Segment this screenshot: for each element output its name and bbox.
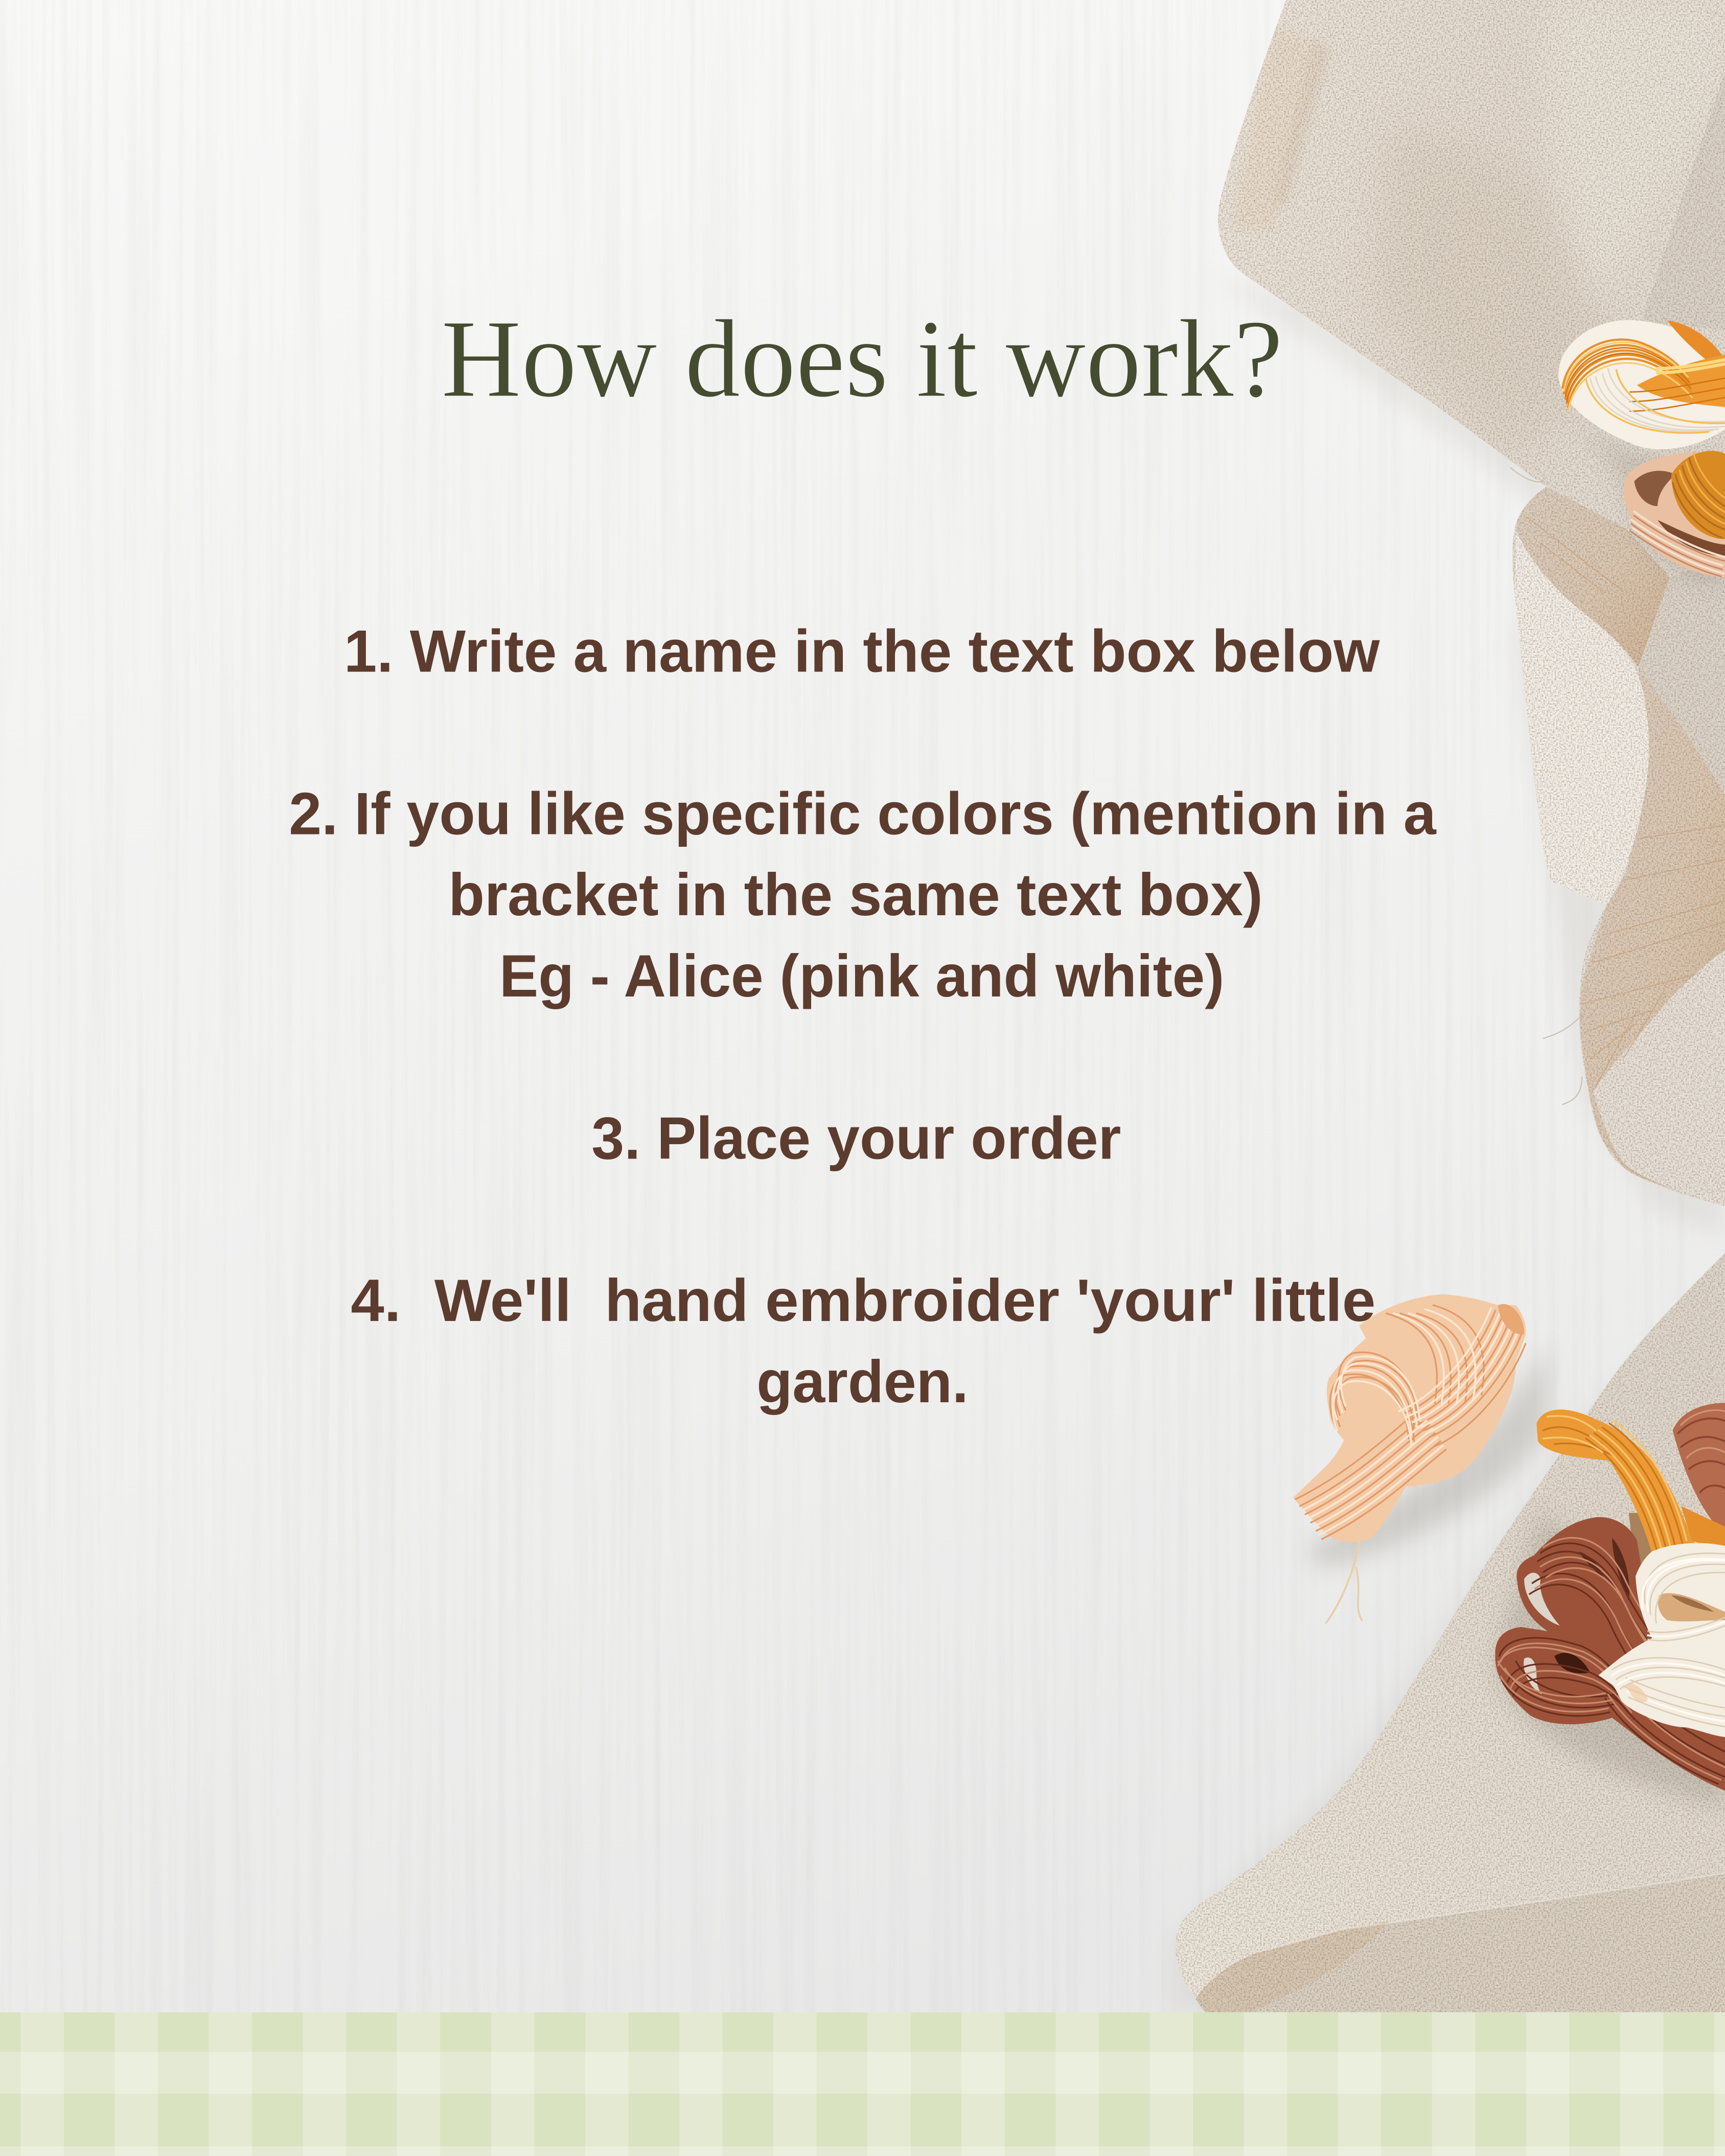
sheer corner of the lower cloth — [1191, 1921, 1389, 2015]
peach skein tail — [1326, 1538, 1362, 1623]
step 2 text: bracket in the same text box) — [448, 861, 1263, 928]
step 4 text — [351, 1267, 1375, 1415]
step 4 text: garden. — [756, 1348, 969, 1415]
cream skein: tan opening — [1658, 1593, 1725, 1621]
icon: peach skein — [1293, 1294, 1526, 1623]
step 2 text — [289, 780, 1437, 1009]
brown skein: dark crevices — [1554, 1538, 1629, 1674]
panel: lower right linen — [1593, 951, 1725, 1206]
brown skein: cloth through the loops — [1524, 1573, 1560, 1626]
panel: gingham border — [0, 2012, 1725, 2156]
icon: sheer mesh behind the brown skein — [1629, 1513, 1656, 1582]
mesh threads — [1527, 517, 1725, 1086]
icon: brown-orange skein, top right — [1623, 451, 1725, 577]
panel: upper linen cloth — [1210, 0, 1725, 1210]
upper cloth darker centre shade — [1375, 124, 1623, 454]
icon: terracotta skein, lower right — [1673, 1403, 1725, 1534]
cloth shadows — [1169, 275, 1725, 2012]
step 4 text: 4. We'll hand embroider 'your' little — [351, 1267, 1375, 1334]
fold right of the upper cloth — [1641, 72, 1725, 330]
title: How does it work? — [441, 297, 1283, 421]
panel: right mid linen — [1638, 557, 1725, 795]
yarn shadows — [1307, 402, 1725, 1809]
panel: sheer mesh band — [1579, 667, 1725, 1206]
panel: pale linen flap — [1514, 529, 1649, 905]
under fold of the lower cloth — [1191, 1873, 1725, 2015]
stray threads — [1510, 468, 1582, 1104]
step 2 text: Eg - Alice (pink and white) — [499, 942, 1224, 1009]
icon: orange skein, lower right — [1536, 1409, 1725, 1582]
icon: orange and white twisted skein, top right — [1558, 320, 1725, 449]
step 3 text: 3. Place your order — [591, 1104, 1121, 1171]
icon: brown skein, lower right — [1495, 1517, 1725, 1791]
icon: cream skein, lower right — [1598, 1543, 1725, 1737]
step 1 text: 1. Write a name in the text box below — [344, 617, 1380, 684]
panel: sheer mesh flap top — [1516, 487, 1670, 667]
panel: lower linen cloth — [1169, 1238, 1725, 2022]
upper cloth hem stripe — [1231, 28, 1318, 234]
step 2 text: 2. If you like specific colors (mention in a — [289, 780, 1437, 847]
